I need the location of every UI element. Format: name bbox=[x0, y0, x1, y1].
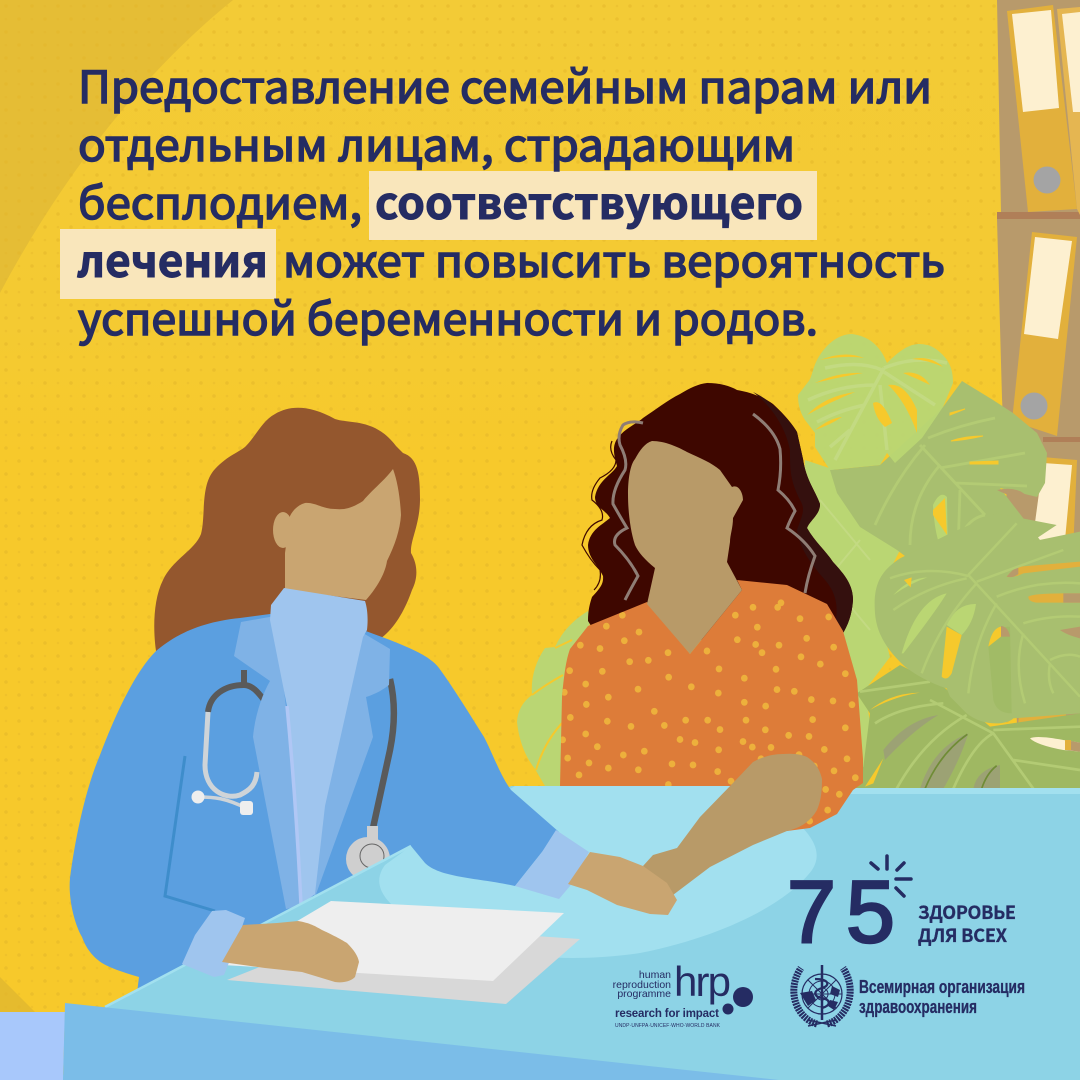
logo: 75 health for all bbox=[787, 856, 1016, 961]
logo: hrp: reproduction bbox=[613, 979, 671, 991]
plant: light leaf behind patient on left bbox=[517, 611, 590, 786]
plant: lower leaf bbox=[850, 665, 1080, 789]
table front face bbox=[0, 1003, 779, 1080]
table top bbox=[60, 786, 1080, 1080]
patient shirt bbox=[560, 580, 863, 831]
table light area bbox=[379, 786, 817, 958]
papers bbox=[223, 901, 580, 1004]
logo: WHO emblem bbox=[794, 965, 850, 1026]
binder 4 bbox=[1015, 457, 1077, 760]
hair streaks bbox=[613, 414, 815, 600]
logo: 75 health for all: ЗДОРОВЬЕ bbox=[918, 899, 1016, 925]
coat pocket line bbox=[165, 756, 215, 911]
headline: успешной беременности и родов. bbox=[78, 284, 818, 348]
logo: hrp: human bbox=[639, 969, 671, 981]
logo: 75 health for all: 5 bbox=[846, 862, 895, 961]
bookshelf with binders bbox=[997, 0, 1080, 790]
doctor coat bbox=[70, 614, 559, 989]
headline: Предоставление семейным парам или bbox=[78, 52, 932, 116]
WHO name: здравоохранения bbox=[859, 997, 977, 1017]
patient face and neck bbox=[628, 441, 743, 654]
logo: hrp bbox=[613, 958, 753, 1029]
plant: big front leaf bbox=[875, 513, 1080, 723]
flyaway hair line bbox=[582, 441, 616, 590]
binder 3 bbox=[1012, 232, 1077, 436]
patient bbox=[559, 383, 863, 895]
stethoscope bbox=[192, 670, 394, 881]
headline: отдельным лицам, страдающим bbox=[78, 110, 795, 174]
headline: бесплодием, bbox=[78, 168, 362, 232]
doctor scarf bbox=[270, 588, 368, 905]
headline bbox=[77, 52, 945, 348]
doctor ear bbox=[273, 512, 293, 548]
logo: hrp: UNDP·UNFPA·UNICEF·WHO·WORLD BANK bbox=[615, 1023, 721, 1029]
shirt polka dots bbox=[559, 599, 859, 825]
doctor hair bbox=[154, 408, 420, 660]
logo: hrp: research for impact bbox=[615, 1008, 719, 1020]
doctor right cuff bbox=[515, 830, 589, 899]
plant: middle leaf bbox=[830, 381, 1047, 620]
table edge highlight bbox=[105, 846, 411, 1007]
doctor left hand bbox=[222, 921, 359, 982]
logo: 75 health for all: ДЛЯ ВСЕХ bbox=[918, 922, 1008, 948]
binder 1 bbox=[1007, 5, 1077, 212]
doctor face and neck bbox=[285, 469, 401, 600]
coat lapels bbox=[234, 616, 390, 909]
hair dark band bbox=[753, 392, 853, 635]
logo: hrp: hrp bbox=[674, 958, 731, 1005]
text highlights bbox=[60, 171, 817, 299]
plant: top light leaf bbox=[798, 334, 953, 470]
logo: 75 health for all: 7 bbox=[787, 862, 836, 961]
doctor left cuff bbox=[182, 910, 245, 977]
doctor bbox=[70, 408, 677, 989]
headline: соответствующего bbox=[375, 168, 803, 232]
doctor right hand bbox=[568, 852, 677, 915]
headline: лечения bbox=[77, 226, 268, 290]
logo rays bbox=[871, 856, 911, 896]
plant: light leaf behind patient on right bbox=[800, 460, 900, 790]
patient arm bbox=[643, 754, 822, 895]
patient hair bbox=[588, 383, 853, 640]
headline: может повысить вероятность bbox=[283, 226, 945, 290]
WHO name bbox=[859, 977, 1025, 1017]
WHO name: Всемирная организация bbox=[859, 977, 1025, 997]
logo: hrp: programme bbox=[617, 988, 671, 1000]
binder 2 bbox=[1057, 7, 1080, 215]
